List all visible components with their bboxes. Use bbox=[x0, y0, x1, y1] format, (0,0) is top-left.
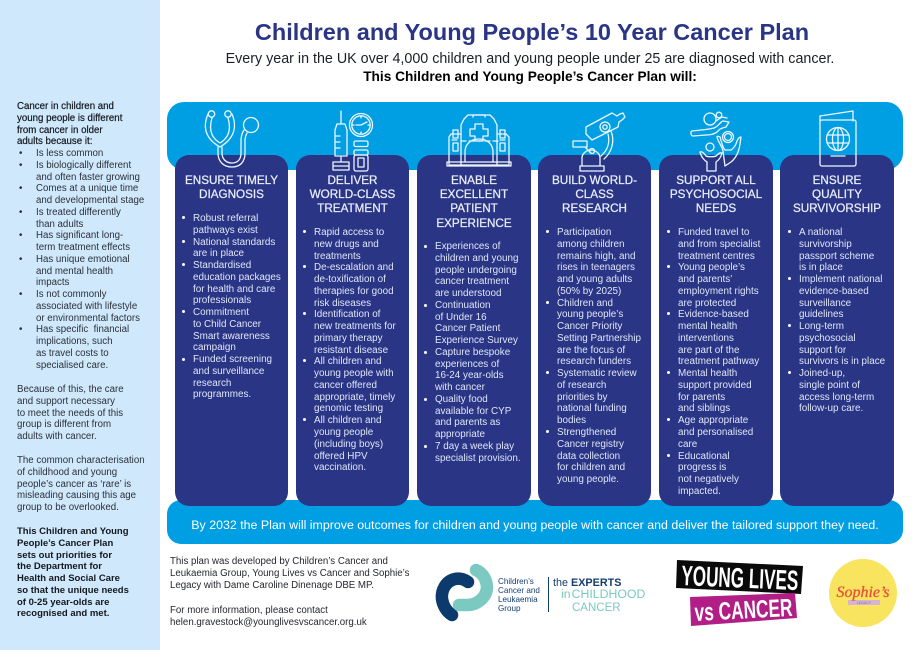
subtitle bbox=[226, 51, 834, 84]
bullet list: guidelines bbox=[799, 309, 843, 320]
bullet list: Children and bbox=[557, 298, 613, 309]
text: intro: Cancer in children and bbox=[17, 101, 114, 112]
bullet list: young people’s bbox=[557, 309, 623, 320]
text: care and support: to meet the needs of this bbox=[17, 408, 123, 419]
bullet list: pathways exist bbox=[193, 225, 258, 236]
bullet list: Experience Survey bbox=[435, 335, 518, 346]
bullet list: are part of the bbox=[678, 345, 739, 356]
bullet list: new drugs and bbox=[314, 239, 379, 250]
logo: Children's Cancer and Leukaemia Group: Cancer and bbox=[498, 586, 540, 595]
bullet list: cancer offered bbox=[314, 380, 377, 391]
heading: CLASS bbox=[575, 188, 614, 201]
bullet list: genomic testing bbox=[314, 403, 383, 414]
bullet list: resistant disease bbox=[314, 345, 388, 356]
bullet list: remains high, and bbox=[557, 251, 636, 262]
icon: passport bbox=[820, 111, 856, 166]
bullet list: Educational bbox=[678, 451, 730, 462]
bullet list: and parents as bbox=[435, 417, 500, 428]
bullet list: De-escalation and bbox=[314, 262, 394, 273]
text: intro: young people is different bbox=[17, 113, 122, 124]
panel: ensure quality survivorship bbox=[780, 155, 894, 506]
bullet list: young people bbox=[314, 427, 373, 438]
heading: EXPERIENCE bbox=[436, 217, 512, 230]
heading: EXCELLENT bbox=[440, 188, 508, 201]
bullet list: Participation bbox=[557, 227, 611, 238]
bullet list: appropriate bbox=[435, 429, 485, 440]
bullet list: de-toxification of bbox=[314, 274, 386, 285]
heading bbox=[310, 174, 395, 215]
bullet list: young people. bbox=[557, 474, 619, 485]
bullet list: Cancer Priority bbox=[557, 321, 622, 332]
bullet list: All children and bbox=[314, 356, 382, 367]
bullet list: professionals bbox=[193, 295, 251, 306]
list: how cancer differs: as travel costs to bbox=[36, 348, 109, 359]
list: how cancer differs: • bbox=[19, 324, 22, 335]
bullet list: All children and bbox=[314, 415, 382, 426]
text: rare characterisation: The common characterisation bbox=[17, 455, 145, 466]
bullet list: impacted. bbox=[678, 486, 721, 497]
list: how cancer differs: Is treated differently bbox=[36, 207, 121, 218]
text: care and support: adults with cancer. bbox=[17, 431, 97, 442]
icon: hospital bbox=[447, 115, 511, 166]
heading: QUALITY bbox=[812, 188, 862, 201]
bullet list: programmes. bbox=[193, 389, 251, 400]
list: how cancer differs: Is less common bbox=[36, 148, 103, 159]
bullet list: for children and bbox=[557, 462, 625, 473]
list: how cancer differs: Is biologically different bbox=[36, 160, 131, 171]
bullet list: Cancer registry bbox=[557, 439, 624, 450]
list: how cancer differs: term treatment effects bbox=[36, 242, 130, 253]
panel: ensure timely diagnosis bbox=[175, 155, 288, 506]
heading: TREATMENT bbox=[317, 202, 388, 215]
bullet list: primary therapy bbox=[314, 333, 383, 344]
bullet list: Mental health bbox=[678, 368, 737, 379]
bullet list: Setting Partnership bbox=[557, 333, 641, 344]
bullet list: employment rights bbox=[678, 286, 759, 297]
bullet list: are the focus of bbox=[557, 345, 625, 356]
bullet list: care bbox=[678, 439, 697, 450]
heading: SUPPORT ALL bbox=[676, 174, 756, 186]
bullet list: Commitment bbox=[193, 307, 249, 318]
bullet list: cancer treatment bbox=[435, 276, 509, 287]
bullet list: for parents bbox=[678, 392, 725, 403]
icon: syringe, clock and vial bbox=[333, 111, 372, 171]
bullet list: rises in teenagers bbox=[557, 262, 635, 273]
credits text: Leukaemia Group, Young Lives vs Cancer and Sophie’s bbox=[170, 568, 409, 579]
logo: Sophie's Legacy: Sophie’s bbox=[836, 584, 890, 601]
text: plan priorities: of 0-25 year-olds are bbox=[17, 597, 109, 608]
heading: BUILD WORLD- bbox=[552, 174, 637, 186]
bullet list: survivors is in place bbox=[799, 356, 885, 367]
bullet list: and young adults bbox=[557, 274, 632, 285]
bullet list: progress is bbox=[678, 462, 726, 473]
bullet list bbox=[314, 227, 396, 473]
text: care and support: Because of this, the care bbox=[17, 384, 124, 395]
heading bbox=[552, 174, 637, 215]
subtitle: This Children and Young People’s Cancer Plan will: bbox=[363, 69, 697, 84]
list: how cancer differs: impacts bbox=[36, 277, 69, 288]
bullet list: treatment pathway bbox=[678, 356, 759, 367]
text: plan priorities: recognised and met. bbox=[17, 608, 109, 619]
heading: DIAGNOSIS bbox=[199, 188, 264, 201]
bullet list: Strengthened bbox=[557, 427, 616, 438]
list: how cancer differs: • bbox=[19, 230, 22, 241]
bullet list: follow-up care. bbox=[799, 403, 863, 414]
bullet list: evidence-based bbox=[799, 286, 869, 297]
bullet list: of Under 16 bbox=[435, 312, 487, 323]
list: how cancer differs: • bbox=[19, 160, 22, 171]
heading bbox=[793, 174, 881, 215]
list: how cancer differs: and mental health bbox=[36, 266, 113, 277]
bullet list: access long-term bbox=[799, 392, 874, 403]
bullet list: new treatments for bbox=[314, 321, 396, 332]
bullet list: among children bbox=[557, 239, 625, 250]
credits text bbox=[170, 556, 410, 628]
text: plan priorities bbox=[17, 526, 129, 619]
heading: DELIVER bbox=[327, 174, 378, 186]
heading: WORLD-CLASS bbox=[310, 188, 395, 201]
logo: Children's Cancer and Leukaemia Group: the EXPERTS bbox=[553, 577, 621, 589]
heading: PATIENT bbox=[450, 202, 498, 215]
bullet list: and siblings bbox=[678, 403, 730, 414]
bullet list: Young people’s bbox=[678, 262, 745, 273]
heading: ENSURE bbox=[813, 174, 861, 186]
bullet list: are protected bbox=[678, 298, 736, 309]
logo: Young Lives vs Cancer bbox=[676, 560, 803, 627]
bullet list: single point of bbox=[799, 380, 860, 391]
bullet list: treatments bbox=[314, 251, 361, 262]
heading: ENSURE TIMELY bbox=[185, 174, 278, 186]
subtitle: Every year in the UK over 4,000 children and young people under 25 are diagnosed with cancer. bbox=[226, 51, 834, 67]
bullet list: (including boys) bbox=[314, 439, 383, 450]
text: plan priorities: This Children and Young bbox=[17, 526, 129, 537]
list: how cancer differs: or environmental factors bbox=[36, 313, 140, 324]
bottom band statement: By 2032 the Plan will improve outcomes for children and young people with cancer and deliver the tailored support they need. bbox=[191, 518, 879, 532]
text: plan priorities: People’s Cancer Plan bbox=[17, 538, 113, 549]
list: how cancer differs: • bbox=[19, 207, 22, 218]
bullet list bbox=[678, 227, 760, 497]
bullet list: Standardised bbox=[193, 260, 251, 271]
bullet list: National standards bbox=[193, 237, 275, 248]
logo: Sophie's Legacy bbox=[829, 559, 897, 627]
bottom blue band bbox=[167, 500, 903, 544]
panel: enable excellent patient experience bbox=[417, 155, 531, 506]
bullet list: priorities by bbox=[557, 392, 608, 403]
credits text: Legacy with Dame Caroline Dinenage DBE MP. bbox=[170, 580, 374, 591]
bullet list: Capture bespoke bbox=[435, 347, 510, 358]
bullet list: research bbox=[193, 378, 231, 389]
bullet list: to Child Cancer bbox=[193, 319, 261, 330]
bullet list: and from specialist bbox=[678, 239, 760, 250]
heading bbox=[185, 174, 278, 201]
bullet list: 16-24 year-olds bbox=[435, 370, 504, 381]
text: rare characterisation: misleading causing this age bbox=[17, 490, 136, 501]
bullet list: children and young bbox=[435, 253, 518, 264]
bullet list: Funded screening bbox=[193, 354, 272, 365]
text: rare characterisation: group to be overlooked. bbox=[17, 502, 119, 513]
bullet list: Systematic review bbox=[557, 368, 637, 379]
bullet list: Age appropriate bbox=[678, 415, 748, 426]
bullet list: Experiences of bbox=[435, 241, 500, 252]
list: how cancer differs: than adults bbox=[36, 219, 83, 230]
bullet list: Long-term bbox=[799, 321, 844, 332]
text: rare characterisation bbox=[17, 455, 145, 513]
bullet list: Cancer Patient bbox=[435, 323, 500, 334]
bullet list: Implement national bbox=[799, 274, 882, 285]
bullet list: and surveillance bbox=[193, 366, 264, 377]
text: rare characterisation: people’s cancer as ‘rare’ is bbox=[17, 479, 131, 490]
text: plan priorities: the Department for bbox=[17, 561, 102, 572]
logo: Children's Cancer and Leukaemia Group: Children’s bbox=[498, 577, 534, 586]
bullet list: Continuation bbox=[435, 300, 490, 311]
credits text: This plan was developed by Children’s Cancer and bbox=[170, 556, 388, 567]
bullet list: specialist provision. bbox=[435, 453, 521, 464]
logo: Children's Cancer and Leukaemia Group: inCHILDHOOD bbox=[561, 587, 645, 601]
list: how cancer differs: and developmental stage bbox=[36, 195, 144, 206]
logo: Children's Cancer and Leukaemia Group bbox=[442, 570, 645, 615]
bullet list: treatment centres bbox=[678, 251, 755, 262]
bullet list: Rapid access to bbox=[314, 227, 384, 238]
bullet list: available for CYP bbox=[435, 406, 511, 417]
bullet list bbox=[193, 213, 281, 400]
bullet list: 7 day a week play bbox=[435, 441, 514, 452]
bullet list: Funded travel to bbox=[678, 227, 749, 238]
bullet list: of research bbox=[557, 380, 606, 391]
list: how cancer differs: Has specific financial bbox=[36, 324, 129, 335]
bullet list: risk diseases bbox=[314, 298, 371, 309]
text: intro: from cancer in older bbox=[17, 125, 103, 136]
bullet list: (50% by 2025) bbox=[557, 286, 621, 297]
credits text: helen.gravestock@younglivesvscancer.org.uk bbox=[170, 617, 367, 628]
heading: PSYCHOSOCIAL bbox=[670, 188, 762, 201]
bullet list: Smart awareness bbox=[193, 331, 270, 342]
list: how cancer differs: • bbox=[19, 183, 22, 194]
bullet list: Joined-up, bbox=[799, 368, 845, 379]
bullet list: survivorship bbox=[799, 239, 852, 250]
bullet list: A national bbox=[799, 227, 842, 238]
list: how cancer differs: and often faster growing bbox=[36, 172, 140, 183]
list: how cancer differs: associated with lifestyle bbox=[36, 301, 137, 312]
icon: people supporting each other bbox=[691, 112, 741, 171]
top blue band bbox=[167, 102, 903, 170]
text: care and support: group is different from bbox=[17, 419, 111, 430]
bullet list: people undergoing bbox=[435, 265, 517, 276]
bullet list: education packages bbox=[193, 272, 281, 283]
bullet list: support provided bbox=[678, 380, 752, 391]
bullet list: support for bbox=[799, 345, 846, 356]
bullet list: for health and care bbox=[193, 284, 275, 295]
panel: deliver world-class treatment bbox=[296, 155, 409, 506]
bullet list: experiences of bbox=[435, 359, 499, 370]
bullet list: interventions bbox=[678, 333, 734, 344]
bullet list: young people with bbox=[314, 368, 394, 379]
bullet list: vaccination. bbox=[314, 462, 366, 473]
bullet list: surveillance bbox=[799, 298, 851, 309]
bullet list: bodies bbox=[557, 415, 586, 426]
bullet list: Evidence-based bbox=[678, 309, 749, 320]
bullet list: offered HPV bbox=[314, 451, 368, 462]
text: intro: adults because it: bbox=[17, 136, 92, 147]
logo: Children's Cancer and Leukaemia Group: CANCER bbox=[572, 602, 621, 614]
bullet list: therapies for good bbox=[314, 286, 394, 297]
list: how cancer differs: Has significant long- bbox=[36, 230, 123, 241]
bullet list: campaign bbox=[193, 342, 236, 353]
list: how cancer differs: Comes at a unique time bbox=[36, 183, 138, 194]
text: plan priorities: so that the unique needs bbox=[17, 585, 129, 596]
panel: build world-class research bbox=[538, 155, 651, 506]
icon: stethoscope bbox=[205, 111, 258, 167]
list: how cancer differs: • bbox=[19, 148, 22, 159]
bullet list: is in place bbox=[799, 262, 843, 273]
bullet list: psychosocial bbox=[799, 333, 856, 344]
list: how cancer differs: Is not commonly bbox=[36, 289, 107, 300]
heading: SURVIVORSHIP bbox=[793, 202, 881, 215]
title: Children and Young People’s 10 Year Cancer Plan bbox=[255, 19, 809, 45]
panel: support all psychosocial needs bbox=[659, 155, 773, 506]
bullet list: data collection bbox=[557, 451, 620, 462]
credits text: For more information, please contact bbox=[170, 605, 328, 616]
bullet list bbox=[557, 227, 641, 485]
bullet list: and personalised bbox=[678, 427, 753, 438]
list: how cancer differs: specialised care. bbox=[36, 360, 108, 371]
bullet list: appropriate, timely bbox=[314, 392, 395, 403]
heading bbox=[670, 174, 762, 215]
text: rare characterisation: of childhood and young bbox=[17, 467, 117, 478]
bullet list: Identification of bbox=[314, 309, 380, 320]
bullet list: national funding bbox=[557, 403, 627, 414]
panel: left sidebar bbox=[0, 0, 160, 650]
bullet list: passport scheme bbox=[799, 251, 874, 262]
heading: ENABLE bbox=[451, 174, 497, 186]
text: intro bbox=[16, 101, 122, 147]
list: how cancer differs: • bbox=[19, 254, 22, 265]
logo: Sophie's Legacy: LEGACY bbox=[857, 601, 872, 605]
list: how cancer differs bbox=[19, 148, 144, 371]
bullet list: Robust referral bbox=[193, 213, 258, 224]
text: plan priorities: sets out priorities for bbox=[17, 550, 112, 561]
bullet list bbox=[435, 241, 521, 464]
bullet list: mental health bbox=[678, 321, 737, 332]
logo: Young Lives vs Cancer: YOUNG LIVES bbox=[681, 560, 799, 596]
bullet list bbox=[799, 227, 885, 414]
bullet list: Quality food bbox=[435, 394, 488, 405]
bullet list: not negatively bbox=[678, 474, 739, 485]
heading bbox=[436, 174, 512, 230]
bullet list: are in place bbox=[193, 248, 244, 259]
list: how cancer differs: • bbox=[19, 289, 22, 300]
bullet list: and parents’ bbox=[678, 274, 732, 285]
bullet list: with cancer bbox=[435, 382, 485, 393]
logo: Young Lives vs Cancer: vs CANCER bbox=[694, 594, 793, 627]
heading: RESEARCH bbox=[562, 202, 627, 215]
heading: NEEDS bbox=[696, 202, 736, 215]
text: care and support: and support necessary bbox=[17, 396, 115, 407]
bullet list: research funders bbox=[557, 356, 631, 367]
list: how cancer differs: Has unique emotional bbox=[36, 254, 130, 265]
logo: Children's Cancer and Leukaemia Group: Group bbox=[498, 604, 521, 613]
bullet list: are understood bbox=[435, 288, 501, 299]
text: care and support bbox=[17, 384, 124, 442]
text: plan priorities: Health and Social Care bbox=[17, 573, 120, 584]
logo: Children's Cancer and Leukaemia Group: Leukaemia bbox=[498, 595, 538, 604]
list: how cancer differs: implications, such bbox=[36, 336, 112, 347]
icon: microscope bbox=[573, 113, 625, 171]
